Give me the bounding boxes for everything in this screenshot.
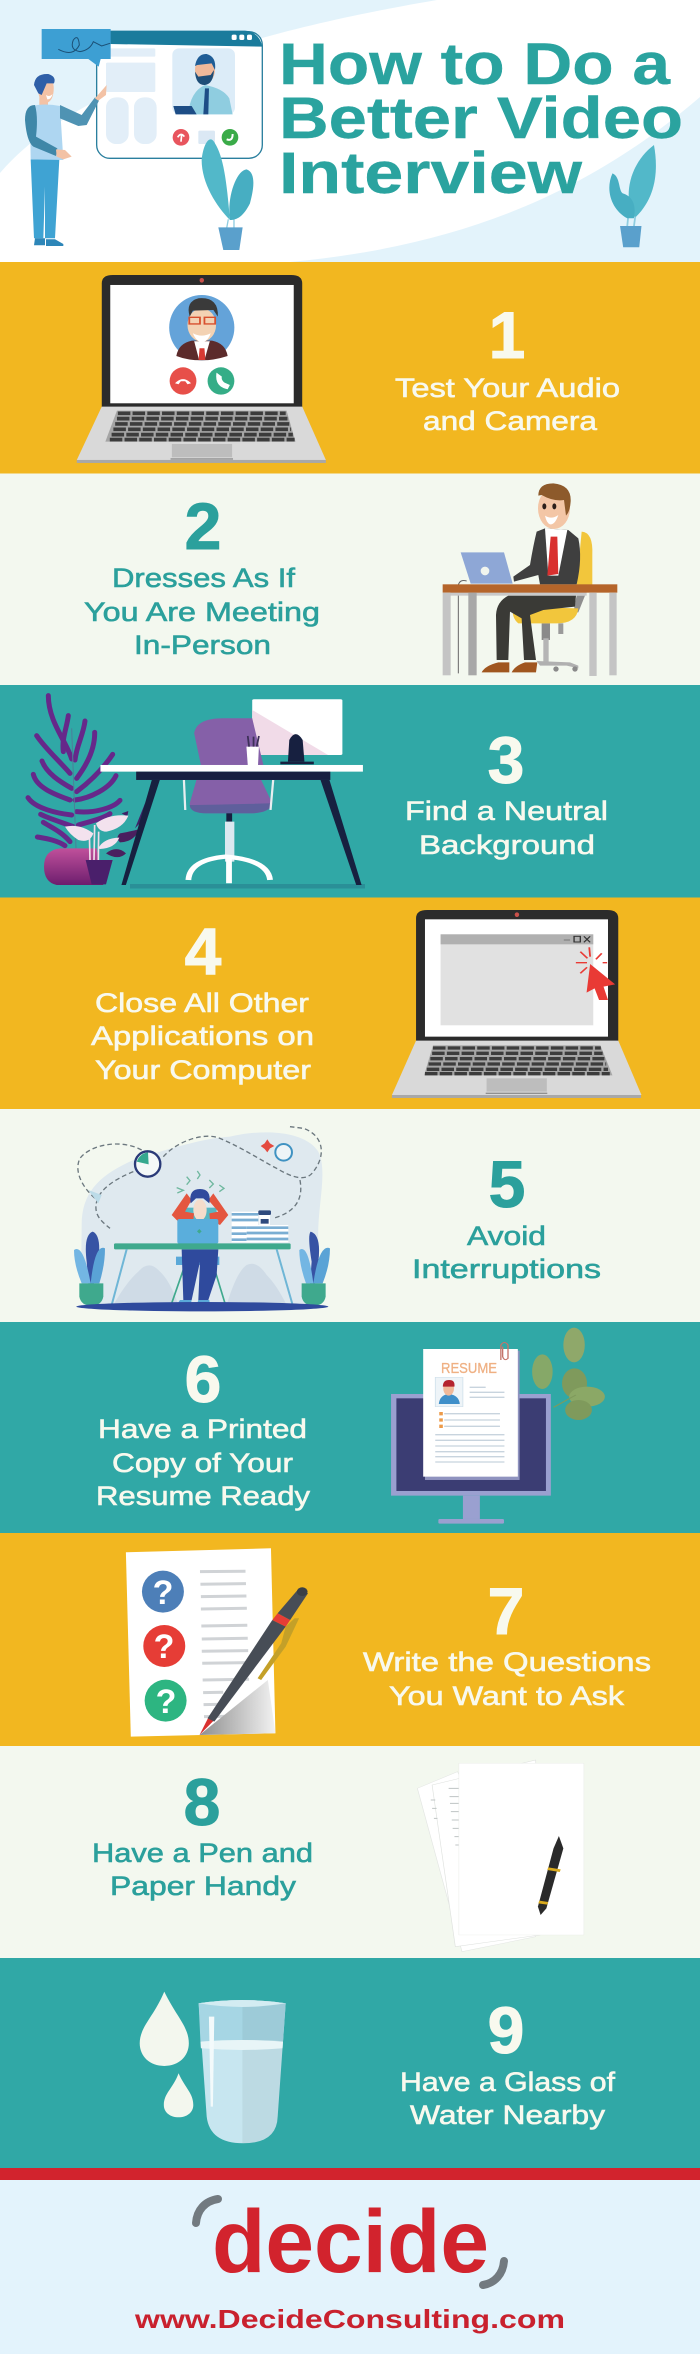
illustration: presenter at video call window xyxy=(25,29,262,250)
icon: presenter xyxy=(25,74,107,246)
caption 9: Water Nearby xyxy=(410,2100,606,2130)
panel: step 4 xyxy=(0,898,700,1109)
panel: step 3 xyxy=(0,685,700,898)
caption 4 xyxy=(91,988,314,1085)
icon: monitor xyxy=(391,1394,551,1524)
title: Better Video xyxy=(279,86,683,151)
icon: potted plant right xyxy=(609,145,656,247)
caption 8: Have a Pen and xyxy=(92,1838,313,1868)
website url: www.DecideConsulting.com xyxy=(134,2304,565,2334)
caption 2: In-Person xyxy=(134,630,271,660)
number 6: 6 xyxy=(185,1342,221,1416)
caption 2 xyxy=(84,563,320,660)
panel: step 5 xyxy=(0,1109,700,1322)
title: How to Do a xyxy=(279,32,671,97)
number 2: 2 xyxy=(185,489,221,563)
caption 6 xyxy=(96,1414,311,1511)
icon: potted plant left xyxy=(202,139,253,250)
question marks: ? xyxy=(154,1628,174,1666)
question marks xyxy=(153,1574,176,1721)
title xyxy=(279,32,683,206)
caption 5: Interruptions xyxy=(412,1254,601,1284)
caption 4: Your Computer xyxy=(95,1055,311,1085)
caption 5: Avoid xyxy=(467,1221,546,1251)
caption 9 xyxy=(400,2067,616,2130)
illustration: water drops and glass xyxy=(140,1992,286,2143)
caption 3: Find a Neutral xyxy=(405,796,608,826)
number 3: 3 xyxy=(488,723,524,797)
caption 7: You Want to Ask xyxy=(389,1681,625,1711)
caption 8: Paper Handy xyxy=(110,1871,297,1901)
illustration: resume on monitor xyxy=(391,1328,605,1524)
caption 1: and Camera xyxy=(423,406,598,436)
number 4: 4 xyxy=(185,914,222,988)
caption 5 xyxy=(412,1221,601,1284)
question marks: ? xyxy=(156,1683,176,1721)
illustration: desk with neutral background xyxy=(28,696,365,888)
icon: clocks xyxy=(135,1139,292,1177)
number 1: 1 xyxy=(489,298,525,372)
icon: desk xyxy=(112,1243,293,1305)
number 7: 7 xyxy=(488,1574,524,1648)
logo: decide: decide xyxy=(212,2191,489,2291)
icon: pen xyxy=(200,1587,308,1735)
illustration: man in suit at desk xyxy=(443,483,617,676)
caption 2: Dresses As If xyxy=(112,563,296,593)
resume heading: RESUME xyxy=(441,1360,497,1377)
caption 9: Have a Glass of xyxy=(400,2067,616,2097)
panel: step 9 xyxy=(0,1958,700,2168)
icon: laptop with video call xyxy=(77,275,326,463)
number 9: 9 xyxy=(488,1993,524,2067)
question marks: ? xyxy=(153,1574,173,1612)
icon: papers and cup xyxy=(232,1210,288,1242)
illustration: stressed person at desk xyxy=(74,1127,330,1311)
caption 6: Resume Ready xyxy=(96,1481,311,1511)
icon: speech bubble xyxy=(42,29,111,67)
caption 7 xyxy=(363,1647,651,1711)
icon: monitor xyxy=(252,699,342,764)
icon: laptop with closing window xyxy=(392,910,641,1098)
icon: person holding head xyxy=(172,1189,228,1305)
caption 6: Have a Printed xyxy=(98,1414,307,1444)
icon: purple plant xyxy=(28,696,146,885)
panel: header xyxy=(0,0,700,262)
illustration: paper and pen xyxy=(417,1760,584,1952)
caption 4: Close All Other xyxy=(95,988,309,1018)
title: Interview xyxy=(279,141,583,206)
icon: desk xyxy=(100,765,363,885)
icon: red cursor xyxy=(576,947,615,1000)
illustration: question sheet and pen xyxy=(126,1548,308,1737)
caption 7: Write the Questions xyxy=(363,1647,651,1677)
panel: step 8 xyxy=(0,1746,700,1958)
caption 8 xyxy=(92,1838,313,1901)
panel: step 2 xyxy=(0,474,700,685)
number 5: 5 xyxy=(489,1147,525,1221)
caption 2: You Are Meeting xyxy=(84,597,320,627)
icon: glass of water xyxy=(199,2000,286,2143)
caption 1: Test Your Audio xyxy=(395,373,620,403)
caption 6: Copy of Your xyxy=(112,1448,293,1478)
icon: leaves xyxy=(532,1328,605,1420)
caption 4: Applications on xyxy=(91,1021,314,1051)
panel: step 7 xyxy=(0,1533,700,1746)
panel: step 1 xyxy=(0,262,700,474)
icon: fountain pen xyxy=(538,1836,563,1915)
panel: footer xyxy=(0,2168,700,2354)
caption 3: Background xyxy=(419,830,595,860)
icon: resume page xyxy=(423,1342,520,1480)
caption 1 xyxy=(395,373,620,436)
icon: plants xyxy=(74,1232,330,1306)
icon: video call window xyxy=(97,31,262,158)
icon: purple chair xyxy=(184,718,273,883)
caption 3 xyxy=(405,796,608,860)
number 8: 8 xyxy=(184,1765,220,1839)
panel: step 6 xyxy=(0,1322,700,1533)
